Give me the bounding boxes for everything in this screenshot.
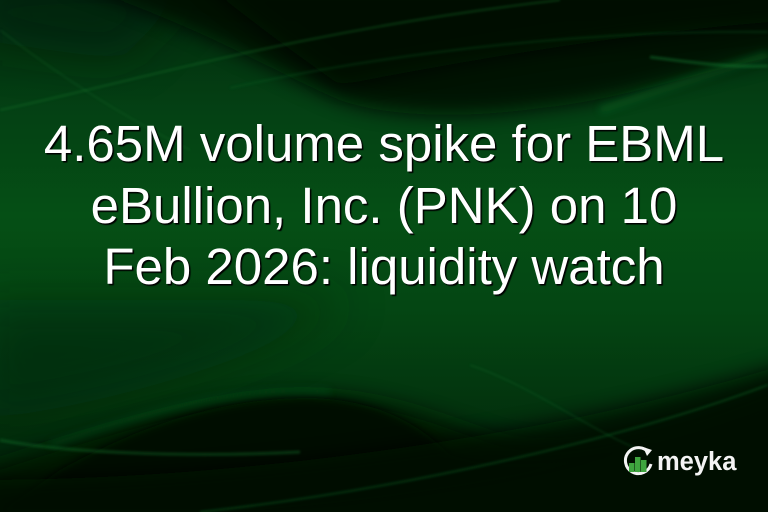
title: 4.65M volume spike for EBML <box>44 115 724 172</box>
icon: ring with bars <box>625 447 652 474</box>
title: eBullion, Inc. (PNK) on 10 <box>91 177 677 234</box>
wordmark: meyka <box>657 448 737 476</box>
logo <box>625 447 737 476</box>
title: Feb 2026: liquidity watch <box>103 238 665 295</box>
title <box>44 115 724 295</box>
